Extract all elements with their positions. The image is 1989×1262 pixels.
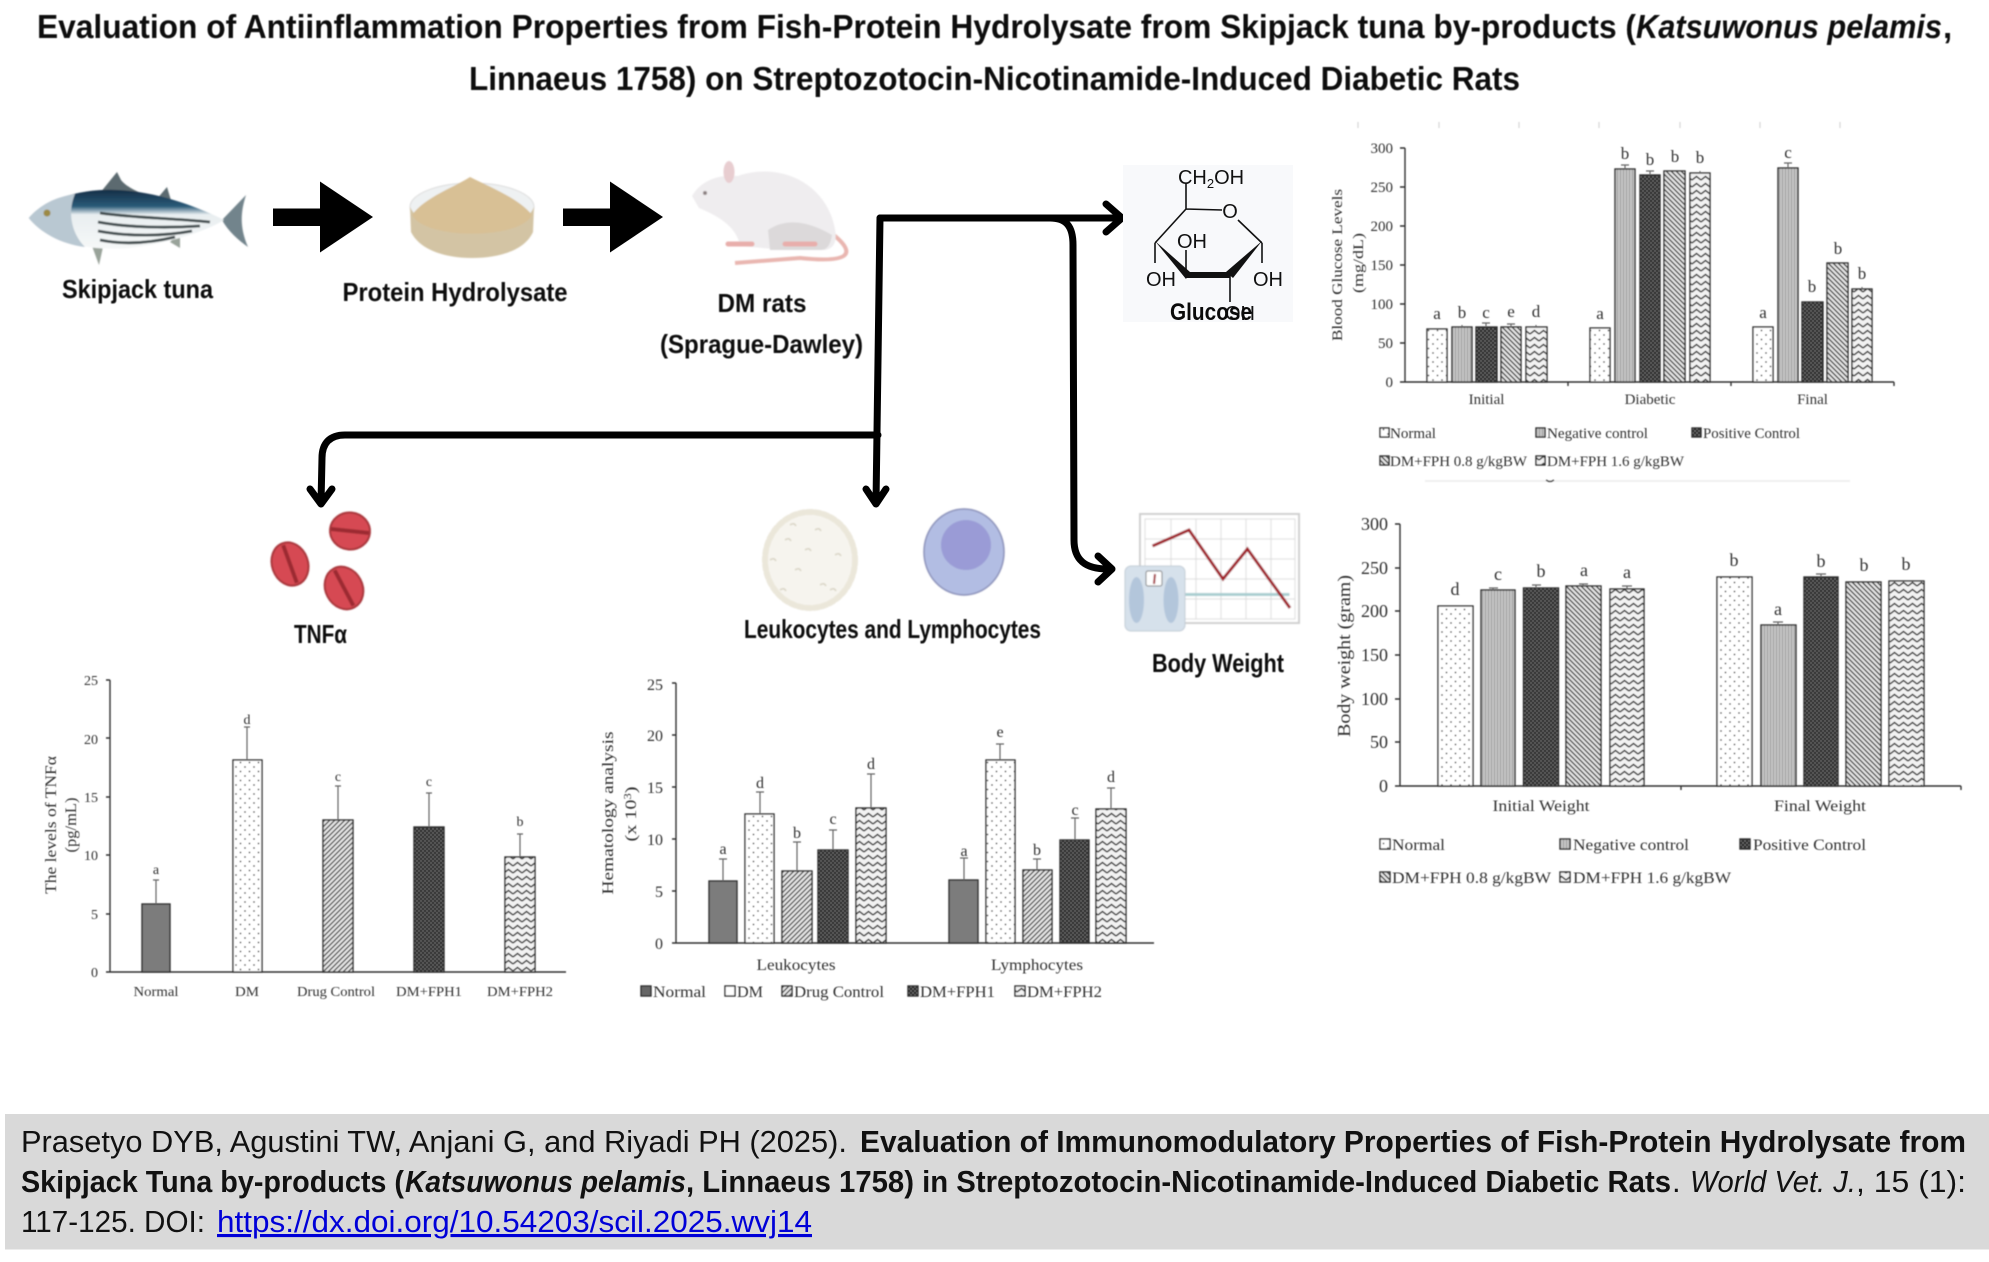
significance letters: b <box>1033 842 1041 859</box>
significance letters: b <box>516 815 524 830</box>
category labels: Leukocytes <box>756 957 836 974</box>
significance letters: c <box>1482 303 1490 322</box>
significance letters: a <box>1433 304 1441 323</box>
y axis tick labels: 25 <box>84 674 98 689</box>
legend: DM+FPH 1.6 g/kgBW <box>1573 870 1732 887</box>
y axis tick labels: 50 <box>1370 732 1388 752</box>
text: citation line 3 with DOI link: 117-125. DOI: <box>21 1204 205 1239</box>
significance letters: e <box>996 724 1004 741</box>
y axis title: (mg/dL) <box>1351 233 1367 293</box>
significance letters: a <box>960 843 968 860</box>
error bars <box>719 744 1115 881</box>
legend: Negative control <box>1547 426 1648 442</box>
legend: DM <box>737 984 763 1001</box>
significance letters: b <box>1671 147 1679 166</box>
bars <box>1427 168 1872 382</box>
arrow: to glucose <box>880 204 1122 232</box>
significance letters: b <box>1808 277 1816 296</box>
significance letters: d <box>1107 769 1115 786</box>
panel: glucose structure: OH <box>1214 167 1244 189</box>
axes <box>106 680 566 972</box>
text: citation line 2: , 15 (1): <box>1856 1164 1966 1199</box>
y axis tick labels: 200 <box>1361 601 1388 621</box>
category labels: DM+FPH1 <box>396 984 462 999</box>
y axis tick labels: 50 <box>1378 336 1393 352</box>
title: Linnaeus 1758) on Streptozotocin-Nicotinamide-Induced Diabetic Rats <box>469 60 1520 97</box>
significance letters: b <box>1621 144 1629 163</box>
y axis tick labels: 150 <box>1370 258 1393 274</box>
y axis tick labels: 10 <box>84 849 98 864</box>
category labels: DM <box>235 984 259 999</box>
legend: DM+FPH2 <box>1027 984 1102 1001</box>
arrow: to leukocytes and lymphocytes <box>866 218 886 504</box>
significance letters: b <box>1730 550 1738 570</box>
significance letters: b <box>1816 551 1826 571</box>
legend: DM+FPH 0.8 g/kgBW <box>1392 870 1552 887</box>
significance letters: c <box>1071 802 1079 819</box>
significance letters: b <box>1858 264 1866 283</box>
legend: Drug Control <box>794 984 885 1001</box>
text: citation line 2: Katsuwonus pelamis <box>405 1164 686 1199</box>
category labels: Initial <box>1469 392 1504 408</box>
y axis tick labels: 0 <box>91 966 98 981</box>
category labels <box>1492 798 1867 815</box>
category labels: Diabetic <box>1625 392 1676 408</box>
y axis title: Body weight (gram) <box>1334 575 1355 737</box>
y axis title <box>43 755 80 894</box>
category labels: Final Weight <box>1774 798 1867 815</box>
y axis title: ) <box>623 786 640 793</box>
y axis tick labels <box>1361 514 1388 796</box>
text: citation line 2: Skipjack Tuna by-products ( <box>21 1164 405 1199</box>
panel: glucose structure: OH <box>1146 269 1176 291</box>
panel: glucose structure: 2 <box>1207 176 1214 191</box>
y axis tick labels: 150 <box>1361 645 1388 665</box>
icon: TNF alpha red cells <box>266 511 372 616</box>
y axis tick labels: 200 <box>1370 219 1393 235</box>
y axis tick labels: 20 <box>647 728 663 745</box>
y axis title: Hematology analysis <box>600 732 617 894</box>
y axis tick labels: 25 <box>647 677 663 694</box>
category labels <box>756 957 1083 974</box>
y axis tick labels: 5 <box>655 884 663 901</box>
category labels <box>134 984 553 999</box>
legend: Positive Control <box>1753 837 1867 854</box>
label: Glucose: Glucose <box>1170 299 1252 326</box>
significance letters: d <box>867 756 875 773</box>
chart: TNF alpha levels <box>43 674 566 999</box>
panel: glucose structure: CH <box>1178 167 1207 189</box>
y axis tick labels: 250 <box>1361 558 1388 578</box>
error bars <box>1462 163 1862 327</box>
label: DM rats (Sprague-Dawley): DM rats <box>718 288 806 318</box>
axes <box>672 683 1154 943</box>
significance letters: b <box>1536 561 1546 581</box>
text: citation line 1: Prasetyo DYB, Agustini TW, Anjani G, and Riyadi PH (2025). <box>21 1124 847 1159</box>
y axis tick labels: 0 <box>1379 776 1388 796</box>
icon: lymphocyte <box>924 509 1004 595</box>
category labels: Lymphocytes <box>991 957 1083 974</box>
text: citation line 2: . <box>1672 1164 1681 1199</box>
error bars <box>1489 574 1826 625</box>
chart: hematology analysis <box>600 677 1154 1001</box>
chart: body weight <box>1334 514 1961 887</box>
legend: Normal <box>653 984 707 1001</box>
significance letters: e <box>1507 302 1515 321</box>
title: Katsuwonus pelamis <box>1636 8 1942 45</box>
significance letters: d <box>1532 302 1541 321</box>
significance letters <box>719 724 1115 860</box>
significance letters <box>153 713 524 878</box>
significance letters: c <box>335 770 341 785</box>
significance letters: c <box>426 775 432 790</box>
category labels: Final <box>1797 392 1828 408</box>
label: DM rats (Sprague-Dawley): (Sprague-Dawley) <box>660 329 863 359</box>
y axis tick labels: 100 <box>1361 689 1388 709</box>
y axis title: (x 10 <box>623 808 640 842</box>
y axis tick labels: 300 <box>1370 141 1393 157</box>
y axis title: Blood Glucose Levels <box>1330 189 1346 341</box>
y axis tick labels <box>84 674 98 981</box>
label: Body Weight: Body Weight <box>1152 648 1284 678</box>
legend: Negative control <box>1573 837 1690 854</box>
significance letters <box>1450 550 1910 619</box>
icon: weight chart and scale <box>1125 514 1299 631</box>
text: citation line 1 <box>21 1124 1966 1159</box>
legend: Normal <box>1392 837 1446 854</box>
y axis tick labels: 250 <box>1370 180 1393 196</box>
text: citation line 1: Evaluation of Immunomodulatory Properties of Fish-Protein Hydrolysate from <box>860 1124 1966 1159</box>
significance letters: d <box>244 713 250 728</box>
category labels: Initial Weight <box>1492 798 1590 815</box>
significance letters: a <box>1596 304 1604 323</box>
text: citation line 2: , Linnaeus 1758) in Streptozotocin-Nicotinamide-Induced Diabetic Rats <box>686 1164 1671 1199</box>
panel: glucose structure: OH <box>1253 269 1283 291</box>
legend: Positive Control <box>1703 426 1800 442</box>
bars <box>142 760 535 972</box>
significance letters: a <box>1623 562 1631 582</box>
y axis tick labels: 15 <box>647 780 663 797</box>
label: DM rats (Sprague-Dawley) <box>660 288 863 359</box>
y axis title <box>600 732 640 894</box>
y axis tick labels: 0 <box>655 936 663 953</box>
legend: Normal <box>1390 426 1436 442</box>
label: Protein Hydrolysate: Protein Hydrolysate <box>342 277 568 307</box>
significance letters: b <box>1646 150 1654 169</box>
text: citation line 3 with DOI link: https://dx.doi.org/10.54203/scil.2025.wvj14 <box>217 1204 812 1239</box>
significance letters: a <box>153 863 160 878</box>
y axis tick labels <box>1370 141 1393 391</box>
panel: glucose structure <box>1123 165 1293 326</box>
title <box>37 8 1952 97</box>
chart: blood glucose levels <box>1330 122 1894 482</box>
bars <box>709 760 1126 943</box>
y axis title: The levels of TNFα <box>43 755 60 894</box>
significance letters <box>1433 143 1866 323</box>
panel: glucose structure: O <box>1222 201 1238 223</box>
legend <box>641 984 1102 1001</box>
panel: glucose structure: OH <box>1177 231 1207 253</box>
y axis tick labels: 5 <box>91 908 98 923</box>
significance letters: b <box>793 825 801 842</box>
arrow: to TNF alpha <box>310 435 878 504</box>
y axis tick labels: 10 <box>647 832 663 849</box>
significance letters: c <box>1494 564 1502 584</box>
label: Skipjack tuna: Skipjack tuna <box>62 274 213 304</box>
legend <box>1380 837 1867 887</box>
panel: glucose structure: OH <box>1225 303 1255 325</box>
significance letters: d <box>756 775 764 792</box>
significance letters: b <box>1458 303 1466 322</box>
category labels: DM+FPH2 <box>487 984 553 999</box>
y axis title: (pg/mL) <box>63 798 80 852</box>
arrow: hydrolysate to rats <box>563 182 663 252</box>
arrow: to body weight <box>1050 218 1112 582</box>
text: citation line 2: World Vet. J. <box>1690 1164 1856 1199</box>
legend: DM+FPH 0.8 g/kgBW <box>1390 454 1528 470</box>
significance letters: b <box>1860 555 1868 575</box>
y axis tick labels <box>647 677 663 953</box>
error bars <box>153 727 523 904</box>
significance letters: c <box>1784 143 1792 162</box>
y axis tick labels: 20 <box>84 733 98 748</box>
legend <box>1380 426 1800 470</box>
significance letters: a <box>1580 560 1588 580</box>
significance letters: a <box>719 841 727 858</box>
title: Evaluation of Antiinflammation Properties from Fish-Protein Hydrolysate from Skipjack tuna by-products ( <box>37 8 1636 45</box>
y axis tick labels: 100 <box>1370 297 1393 313</box>
bars <box>1438 577 1924 786</box>
y axis tick labels: 0 <box>1386 375 1393 391</box>
legend: DM+FPH1 <box>920 984 995 1001</box>
title: , <box>1943 8 1952 45</box>
significance letters: c <box>829 811 837 828</box>
significance letters: a <box>1759 303 1767 322</box>
arrows: branching flow lines from rats <box>310 204 1122 582</box>
significance letters: b <box>1834 239 1842 258</box>
arrow: tuna to hydrolysate <box>273 182 373 252</box>
icon: protein hydrolysate powder dish <box>410 177 534 258</box>
axes <box>1400 148 1894 386</box>
y axis title <box>1330 189 1367 341</box>
y axis title: 3 <box>623 793 634 800</box>
category labels: Drug Control <box>297 984 375 999</box>
legend: DM+FPH 1.6 g/kgBW <box>1547 454 1685 470</box>
significance letters: b <box>1696 148 1704 167</box>
category labels: Normal <box>134 984 179 999</box>
label: Leukocytes and Lymphocytes: Leukocytes and Lymphocytes <box>744 614 1041 644</box>
icon: white rat <box>692 161 846 263</box>
text: citation line 2 <box>21 1164 1966 1199</box>
significance letters: b <box>1902 554 1910 574</box>
panel: citation <box>5 1114 1989 1250</box>
significance letters: a <box>1774 599 1782 619</box>
significance letters: d <box>1450 579 1460 599</box>
icon: leukocyte <box>765 512 855 608</box>
y axis tick labels: 15 <box>84 791 98 806</box>
y axis tick labels: 300 <box>1361 514 1388 534</box>
category labels <box>1469 392 1828 408</box>
label: TNF alpha: TNFα <box>294 619 347 649</box>
icon: skipjack tuna <box>29 172 248 265</box>
axes <box>1395 524 1961 790</box>
